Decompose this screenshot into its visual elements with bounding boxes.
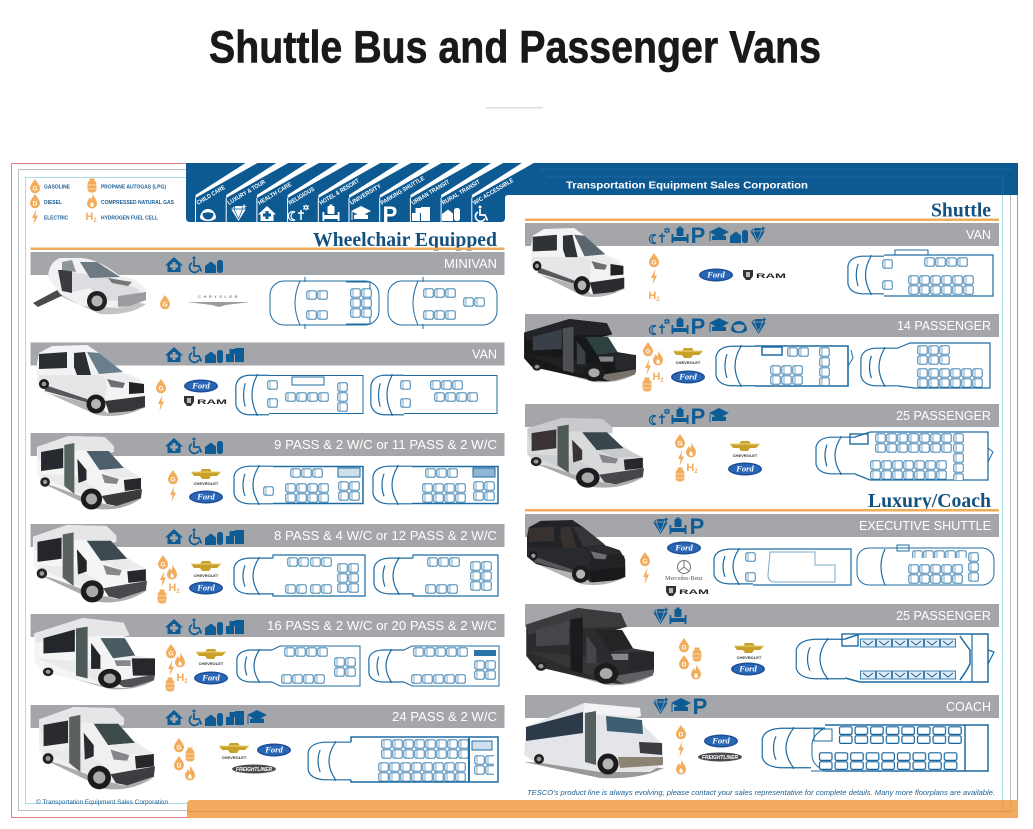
fuel legend [30,178,174,225]
panel: 25 passenger shuttle [525,404,999,488]
infographic frame [12,164,1018,818]
copyright note: © Transportation Equipment Sales Corporation [36,798,168,806]
tab: hotel and resort [318,163,380,222]
panel: van: VAN [472,346,497,362]
icons: 16 pass uses [165,618,244,635]
fuels: 25 passenger coach [679,638,702,680]
logos: 24 pass [219,743,291,774]
floorplan: executive shuttle A [714,548,851,585]
panel: shuttle van: VAN [966,227,991,242]
floorplan: executive shuttle B [857,545,994,585]
fuels: 8 pass [158,555,180,604]
logo: chrysler: CHRYSLER [198,294,240,299]
floorplan: coach [762,725,988,771]
icons: 9 pass uses [165,438,223,454]
fuels: 14 passenger [642,342,664,392]
icons: coach uses [653,694,707,719]
icons: 25 passenger coach uses [653,607,686,624]
panel: 8 pass and 12 pass [30,524,504,604]
icons: 24 pass uses [165,710,267,726]
floorplan: 8 pass [234,555,365,596]
fuel legend: PROPANE AUTOGAS (LPG) [101,184,166,190]
tab: religious: RELIGIOUS [288,187,316,207]
tab: parking shuttle [380,163,442,227]
tab: luxury and tour [226,163,288,222]
panel: van [30,342,504,416]
logos: 25 passenger [728,441,762,476]
fuel legend: DIESEL [44,200,63,206]
panel: 14 passenger [524,314,999,392]
icons: van uses [165,346,244,363]
floorplan: 24 pass [308,737,498,782]
vehicle: white ford van [37,345,146,416]
vehicle: ford super duty bus [39,707,155,789]
floorplan: minivan B [388,277,497,329]
panel: 9 pass and 11 pass [30,433,504,510]
vehicle: minivan with ramp [33,258,146,314]
vehicle: dark luxury bus [526,608,654,685]
panel: minivan: MINIVAN [444,256,497,271]
icons: minivan uses [165,256,223,273]
panel: minivan [30,252,504,329]
page title: Shuttle Bus and Passenger Vans [209,22,821,72]
fuel legend: ELECTRIC [44,216,68,222]
vehicle: black e-series shuttle [524,319,636,382]
logos: 14 passenger [671,348,705,384]
fuels: van [156,379,166,411]
orange footer band [187,800,1018,818]
vehicle: white freightliner coach [524,703,664,778]
logos: 9 pass [189,469,223,504]
tab: university [349,163,411,222]
fuels: 9 pass [168,470,178,502]
icons: shuttle van uses [649,223,766,248]
tab: university: UNIVERSITY [349,184,383,207]
fuels: coach [676,725,686,774]
logos: 8 pass [189,561,223,594]
floorplan: 14 passenger A [716,345,853,387]
panel: shuttle van [525,223,999,303]
panel: 25 passenger coach: 25 PASSENGER [896,608,991,623]
floorplan: 25 passenger [816,432,993,480]
icons: executive shuttle uses [653,514,704,539]
heading: luxury coach: Luxury/Coach [868,490,991,512]
tab: wheelchair accessible [472,163,534,222]
logos: shuttle van [699,268,786,282]
floorplan: 12 pass [374,555,498,596]
vehicle: ford e-series cutaway [33,525,147,602]
panel: executive shuttle [525,514,999,596]
tab: religious [288,163,350,222]
tab: child care [196,163,258,222]
fuels: 25 passenger [675,434,698,482]
panel: 24 pass [30,705,504,789]
tab: urban transit [410,163,472,222]
tab: luxury and tour: LUXURY & TOUR [227,179,267,207]
floorplan: 20 pass [369,646,499,686]
floorplan: 16 pass [237,646,360,686]
floorplan: van B [371,374,497,416]
heading: shuttle: Shuttle [931,200,991,222]
fuels: 16 pass [166,644,188,692]
icons: 14 passenger uses [649,314,767,339]
panel: 25 passenger coach [525,604,999,685]
panel: 16 pass and 20 pass [30,614,504,692]
tab: wheelchair accessible: W/C ACCESSIBLE [472,178,515,207]
tab: parking shuttle: PARKING SHUTTLE [380,176,426,207]
logo: chrysler [187,294,250,307]
floorplan: 14 passenger B [861,343,990,388]
logos: van [184,380,227,406]
tab: health care [257,163,319,222]
tab: rural transit [441,163,503,222]
panel: 8 pass and 12 pass: 8 PASS & 4 W/C or 12 PASS & 2 W/C [274,528,497,543]
vehicle: ram promaster van [531,228,625,297]
floorplan: 11 pass [373,465,498,505]
tab: rural transit: RURAL TRANSIT [441,179,482,207]
vehicle: white cutaway bus [34,618,155,689]
logos: executive shuttle: Mercedes-Benz [665,576,703,582]
vehicle: silver cutaway shuttle [527,418,644,488]
tab: urban transit: URBAN TRANSIT [411,179,451,207]
vehicle: ford transit cutaway [37,436,142,510]
panel: executive shuttle: EXECUTIVE SHUTTLE [859,518,991,533]
panel: 16 pass and 20 pass: 16 PASS & 2 W/C or 20 PASS & 2 W/C [267,618,497,633]
fuels: shuttle van [648,253,660,303]
fuels: executive shuttle [640,552,650,584]
panel: coach [524,694,999,778]
fuels: 24 pass [174,738,195,780]
panel: 24 pass: 24 PASS & 2 W/C [392,709,497,724]
floorplan: minivan A [270,277,379,329]
logos: executive shuttle [665,542,709,596]
tab: child care: CHILD CARE [196,185,226,207]
fuel legend: HYDROGEN FUEL CELL [101,216,159,222]
floorplan: van A [236,374,363,416]
logos: 16 pass [194,649,228,684]
panel: 9 pass and 11 pass: 9 PASS & 2 W/C or 11 PASS & 2 W/C [274,437,497,452]
top navy banner with application tabs [186,163,1018,227]
panel: coach: COACH [946,699,991,714]
company name: Transportation Equipment Sales Corporation [566,180,808,192]
icons: 8 pass uses [165,528,244,545]
title divider [486,107,543,108]
panel: 25 passenger shuttle: 25 PASSENGER [896,408,991,423]
floorplan: shuttle van [848,250,993,296]
disclaimer: TESCO's product line is always evolving, please contact your sales representative for complete details. Many more floorplans are available. [527,788,995,797]
fuel legend: GASOLINE [44,184,70,190]
icons: 25 passenger uses [649,404,729,429]
tab: health care: HEALTH CARE [257,182,293,207]
vehicle: black executive van [527,520,626,585]
heading: wheelchair equipped: Wheelchair Equipped [313,229,497,251]
fuel: gasoline [160,295,170,309]
panel: 14 passenger: 14 PASSENGER [897,318,991,333]
tab: hotel and resort: HOTEL & RESORT [319,178,361,207]
floorplan: 25 passenger coach [796,634,994,682]
logos: coach [698,734,742,762]
fuel legend: COMPRESSED NATURAL GAS [101,200,174,206]
floorplan: 9 pass [234,465,363,505]
logos: 25 passenger coach [731,643,765,676]
